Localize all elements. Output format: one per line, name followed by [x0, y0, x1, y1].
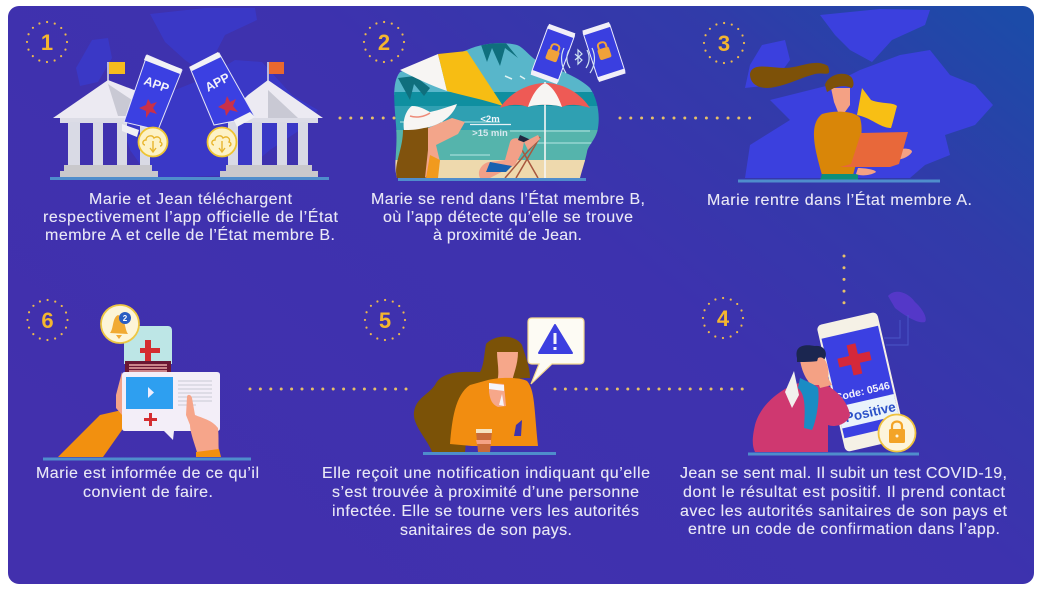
small umbrella — [500, 82, 590, 178]
ground line — [748, 452, 919, 456]
distance label: <2m — [480, 114, 500, 125]
body — [450, 378, 538, 446]
text: step 2: à proximité de Jean. — [433, 227, 582, 244]
text: step 5: Elle reçoit une notification indiquant qu’elle — [322, 465, 650, 482]
illustration: Marie receives notification — [414, 318, 584, 454]
ground line — [43, 458, 251, 460]
icon: right phone: APP — [203, 70, 232, 95]
Jean in deck chair — [479, 135, 540, 178]
text: step 1: membre A et celle de l’État membre B. — [45, 225, 335, 244]
arm gap — [514, 420, 522, 436]
hair — [750, 63, 829, 88]
hair — [414, 337, 530, 452]
text: step 4: avec les autorités sanitaires de son pays et — [680, 503, 1008, 520]
icon: lock badge — [878, 414, 916, 452]
icon: phone with lock right — [582, 22, 626, 82]
beach background — [390, 40, 605, 180]
ground line — [738, 180, 940, 182]
illustration: Marie with laptop and flag — [738, 63, 940, 181]
coffee cup — [476, 429, 492, 452]
text: step 6: convient de faire. — [83, 484, 213, 501]
icon: left building — [53, 62, 160, 178]
icon: notification bell — [101, 305, 139, 343]
ground line — [398, 178, 586, 181]
connector: 1 to 2 — [340, 116, 396, 120]
text: step 2 — [371, 189, 645, 244]
illustration: beach scene — [390, 22, 626, 180]
icon: left phone: APP — [142, 74, 171, 96]
laptop — [840, 132, 908, 167]
step 5 badge — [365, 300, 405, 340]
body — [814, 112, 862, 175]
cloud — [888, 292, 926, 322]
phone — [816, 312, 906, 452]
distance label: >15 min — [472, 128, 508, 139]
map: Europe behind step 3 — [745, 9, 993, 178]
step 3 badge — [704, 23, 744, 63]
text: step 6 — [36, 465, 259, 501]
connector: 3 to 4 — [842, 256, 846, 304]
tablet — [122, 372, 220, 440]
step 1 badge — [27, 22, 67, 62]
step 2 badge — [364, 22, 404, 62]
speech bubble with warning — [528, 318, 584, 384]
text: step 1: Marie et Jean téléchargent — [89, 191, 293, 208]
icon: left download badge — [138, 128, 168, 156]
head — [825, 74, 854, 112]
phone in hand — [489, 383, 506, 407]
step 5 badge: 5 — [379, 308, 391, 333]
illustration: Jean feeling sick with phone — [748, 292, 926, 454]
map: Europe behind step 1 — [76, 8, 318, 178]
distance label — [470, 114, 511, 139]
phone — [124, 326, 172, 373]
step 4 badge: 4 — [717, 306, 730, 331]
text: step 5: infectée. Elle se tourne vers les autorités — [332, 503, 639, 520]
icon: phone with lock left — [531, 24, 575, 84]
Marie on the beach — [396, 104, 465, 178]
tissue — [785, 371, 799, 408]
icon: left phone — [122, 55, 182, 137]
scarf — [798, 378, 819, 430]
step 4 badge — [703, 298, 743, 338]
text: step 2: Marie se rend dans l’État membre B, — [371, 189, 645, 208]
man body — [753, 380, 850, 452]
phone: Code: 0546 — [834, 380, 891, 404]
ground line — [423, 452, 556, 455]
icon: right building — [220, 62, 323, 178]
icon: right download badge — [208, 128, 236, 156]
right hand — [186, 395, 219, 452]
illustration: two government buildings with app phones — [50, 52, 329, 178]
skirt — [820, 174, 858, 180]
text: step 5 — [322, 465, 650, 539]
flag — [857, 88, 897, 128]
text: step 3: Marie rentre dans l’État membre A. — [707, 190, 972, 209]
text: step 5: s’est trouvée à proximité d’une personne — [332, 484, 639, 501]
head and hair — [796, 345, 826, 385]
cuff — [196, 449, 221, 457]
arm hand — [814, 357, 832, 388]
text: step 1 — [43, 191, 339, 244]
step 1 badge: 1 — [41, 30, 53, 55]
step 6 badge: 6 — [41, 308, 54, 333]
text: step 4 — [680, 465, 1008, 538]
text: step 1: respectivement l’app officielle de l’État — [43, 207, 339, 226]
ground line — [50, 177, 329, 180]
icon: right phone — [189, 52, 255, 127]
icon: notification bell: 2 — [123, 314, 128, 323]
text: step 4: entre un code de confirmation dans l’app. — [688, 521, 1000, 538]
illustration: phone and tablet with hands — [43, 305, 251, 459]
large umbrella — [400, 51, 503, 106]
step 2 badge: 2 — [378, 30, 390, 55]
phone: Positive — [843, 399, 898, 425]
circuit lines — [884, 315, 908, 345]
hand — [856, 149, 912, 175]
connector: 4 to 5 — [555, 388, 751, 390]
left hand — [116, 372, 122, 415]
connector: 2 to 3 — [620, 116, 751, 120]
arm — [58, 410, 122, 457]
face — [497, 352, 518, 382]
icon: bluetooth signal — [562, 48, 594, 73]
text: step 4: Jean se sent mal. Il subit un test COVID-19, — [680, 465, 1007, 482]
text: step 2: où l’app détecte qu’elle se trouve — [383, 209, 633, 226]
step 6 badge — [28, 300, 68, 340]
text: step 4: dont le résultat est positif. Il prend contact — [683, 484, 1006, 501]
text: step 6: Marie est informée de ce qu’il — [36, 465, 259, 482]
step 3 badge: 3 — [718, 31, 730, 56]
connector: 5 to 6 — [250, 388, 406, 390]
text: step 5: sanitaires de son pays. — [400, 522, 572, 539]
